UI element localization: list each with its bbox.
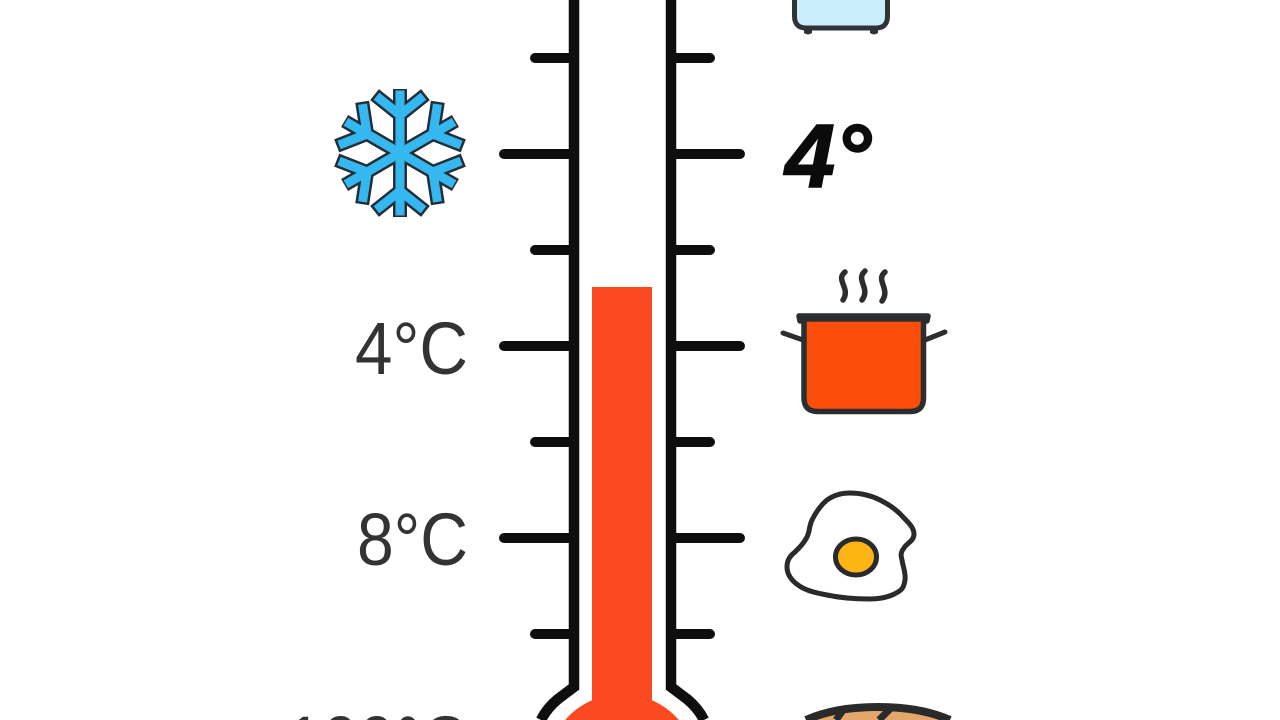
thermometer glass outline xyxy=(541,0,704,720)
pot body xyxy=(804,319,924,412)
icon: fridge xyxy=(794,0,888,34)
icon: fried egg xyxy=(787,493,914,599)
icon: snowflake xyxy=(340,95,460,211)
label: 4°C: 4°C xyxy=(355,307,468,390)
icon: steaming pot xyxy=(783,271,945,412)
scale ticks xyxy=(504,58,740,634)
icon: bread loaf xyxy=(806,707,950,720)
steam xyxy=(842,271,885,301)
thermometer xyxy=(504,0,740,720)
pot rim xyxy=(799,316,928,321)
label: 8°C: 8°C xyxy=(357,498,468,581)
red mercury column and bulb xyxy=(565,287,679,720)
pot handles xyxy=(783,332,945,340)
label: 4° bold: 4° xyxy=(783,107,872,207)
